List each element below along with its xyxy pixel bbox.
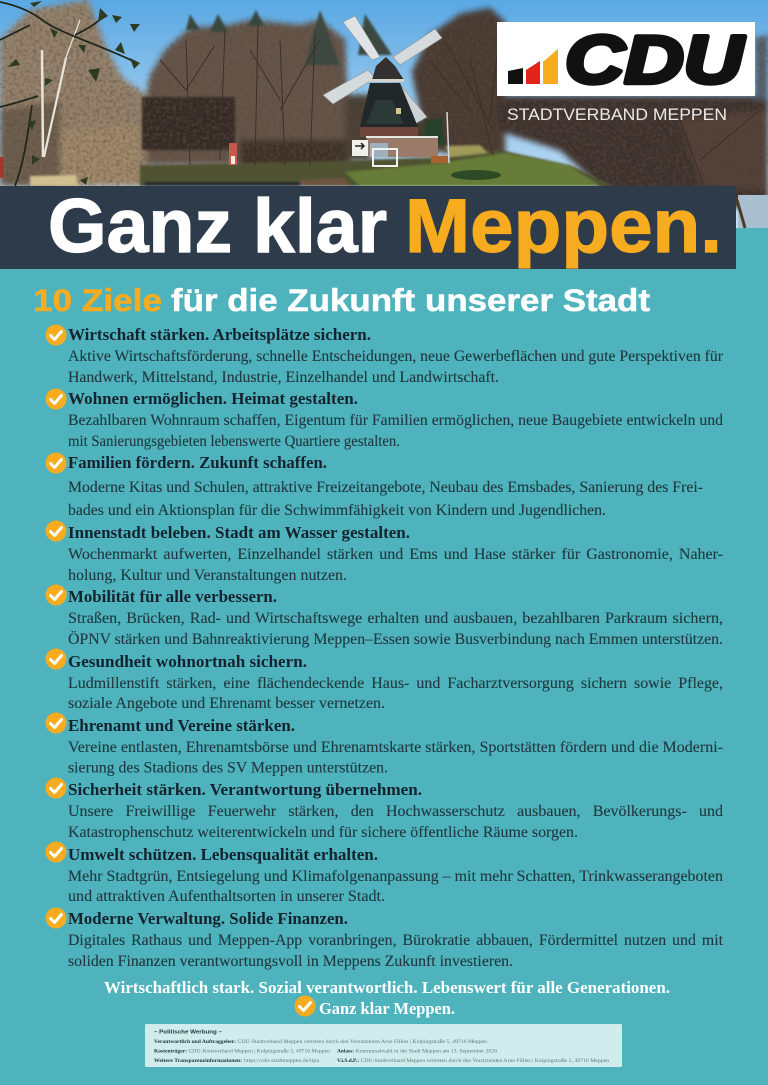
logo subtitle: STADTVERBAND MEPPEN <box>507 106 727 124</box>
goal 8 <box>46 778 723 841</box>
goal 2: Wohnen ermöglichen. Heimat gestalten. <box>68 389 358 408</box>
legal notice box: Weitere Transparenzinformationen: <box>154 1058 242 1064</box>
subheading: 10 Ziele <box>33 282 162 318</box>
goal 8: Katastrophenschutz weiterentwickeln und für sichere öffentliche Räume sorgen. <box>68 824 578 841</box>
goal 9 <box>46 842 723 905</box>
goal 2 <box>46 388 723 450</box>
foreground branch with leaves <box>0 1 140 186</box>
goal 5 <box>46 584 723 648</box>
goal 10: Digitales Rathaus und Meppen-App voranbringen, Bürokratie abbauen, Fördermittel nutzen und mit <box>68 932 724 949</box>
windmill <box>0 16 501 180</box>
legal notice box: Anlass: <box>337 1048 354 1054</box>
goal 10: soliden Finanzen verantwortungsvoll in Meppens Zukunft investieren. <box>68 953 513 970</box>
goal 4: Innenstadt beleben. Stadt am Wasser gestalten. <box>68 523 410 542</box>
goal 5: Straßen, Brücken, Rad- und Wirtschaftswege erhalten und ausbauen, bezahlbaren Parkraum sichern, <box>68 610 723 627</box>
goal 3: bades und ein Aktionsplan für die Schwimmfähigkeit von Kindern und Jugendlichen. <box>68 502 606 519</box>
goal 8: Unsere Freiwillige Feuerwehr stärken, den Hochwasserschutz ausbauen, Bevölkerungs- und <box>68 803 723 820</box>
photo: windmill landscape <box>0 0 768 228</box>
goal 6: Ludmillenstift stärken, eine flächendeckende Haus- und Facharztversorgung sichern sowie Pflege, <box>68 675 723 692</box>
goal 3: Moderne Kitas und Schulen, attraktive Freizeitangebote, Neubau des Emsbades, Sanierung des Frei- <box>68 479 703 496</box>
goal 1: Handwerk, Mittelstand, Industrie, Einzelhandel und Landwirtschaft. <box>68 369 499 386</box>
goal 2: Bezahlbaren Wohnraum schaffen, Eigentum für Familien ermöglichen, neue Baugebiete entwickeln und <box>68 412 723 429</box>
goal 5: Mobilität für alle verbessern. <box>68 587 277 606</box>
logo wordmark: CDU <box>565 22 745 98</box>
title text orange: Meppen. <box>405 184 722 269</box>
legal notice box: Kostenträger: <box>154 1048 187 1054</box>
goal 9: Umwelt schützen. Lebensqualität erhalten. <box>68 845 378 864</box>
legal notice box: https://cdu-stadtmeppen.de/ttpa <box>244 1058 320 1064</box>
goal 4: Wochenmarkt aufwerten, Einzelhandel stärken und Ems und Hase stärker für Gastronomie, Naher- <box>68 546 723 563</box>
title text white: Ganz klar <box>48 184 387 269</box>
goal 6: Gesundheit wohnortnah sichern. <box>68 652 307 671</box>
legal notice box: Kommunalwahl in der Stadt Meppen am 13. September 2026 <box>356 1048 497 1054</box>
legal notice box <box>145 1024 622 1067</box>
goal 3 <box>46 452 703 519</box>
goal 1: Aktive Wirtschaftsförderung, schnelle Entscheidungen, neue Gewerbeflächen und gute Perspektiven für <box>68 348 724 365</box>
subheading: für die Zukunft unserer Stadt <box>171 282 651 318</box>
goal 7: Vereine entlasten, Ehrenamtsbörse und Ehrenamtskarte stärken, Sportstätten fördern und die Moderni- <box>68 739 723 756</box>
CDU logo <box>497 22 755 98</box>
water at right edge <box>737 195 768 228</box>
goal 3: Familien fördern. Zukunft schaffen. <box>68 453 327 472</box>
goal 5: ÖPNV stärken und Bahnreaktivierung Meppen–Essen sowie Busverbindung nach Emmen unterstützen. <box>68 631 723 648</box>
goal 1: Wirtschaft stärken. Arbeitsplätze sichern. <box>68 325 371 344</box>
goal 9: Mehr Stadtgrün, Entsiegelung und Klimafolgenanpassung – mit mehr Schatten, Trinkwasserangeboten <box>68 868 723 885</box>
goal 2: mit Sanierungsgebieten lebenswerte Quartiere gestalten. <box>68 433 400 450</box>
goal 1 <box>46 324 724 386</box>
goal 10 <box>46 908 724 970</box>
legal notice box: V.i.S.d.P.: <box>337 1058 359 1064</box>
goal 9: und attraktiven Aufenthaltsorten in unserer Stadt. <box>68 888 385 905</box>
goal 10: Moderne Verwaltung. Solide Finanzen. <box>68 909 348 928</box>
logo bars <box>508 49 558 84</box>
legal notice box: CDU-Stadtverband Meppen vertreten durch den Vorsitzenden Arne Fillies | Kolpingstraße 5, 49716 Meppen <box>360 1057 609 1064</box>
goal 4: holung, Kultur und Veranstaltungen nutzen. <box>68 567 347 584</box>
legal notice box: – Politische Werbung – <box>154 1030 223 1036</box>
goal 7: sierung des Stadions des SV Meppen unterstützen. <box>68 760 388 776</box>
closing slogan: Ganz klar Meppen. <box>319 999 455 1018</box>
closing slogan: Wirtschaftlich stark. Sozial verantwortlich. Lebenswert für alle Generationen. <box>104 978 670 997</box>
legal notice box: CDU-Stadtverband Meppen vertreten durch den Vorsitzenden Arne Fillies | Kolpingstraße 5, 49716 Meppen <box>238 1038 487 1045</box>
goal 7: Ehrenamt und Vereine stärken. <box>68 716 295 735</box>
goal 8: Sicherheit stärken. Verantwortung übernehmen. <box>68 780 422 799</box>
closing slogan <box>104 978 670 1018</box>
goal 4 <box>46 520 723 584</box>
title banner <box>0 184 736 269</box>
legal notice box: CDU-Kreisverband Meppen | Kolpingstraße 5, 49716 Meppen <box>188 1048 330 1054</box>
legal notice box: Verantwortlich und Auftraggeber: <box>154 1039 236 1045</box>
goal 7 <box>46 712 723 776</box>
goal 6 <box>46 648 723 712</box>
subheading <box>33 282 651 318</box>
goal 6: soziale Angebote und Ehrenamt besser vernetzen. <box>68 695 385 712</box>
